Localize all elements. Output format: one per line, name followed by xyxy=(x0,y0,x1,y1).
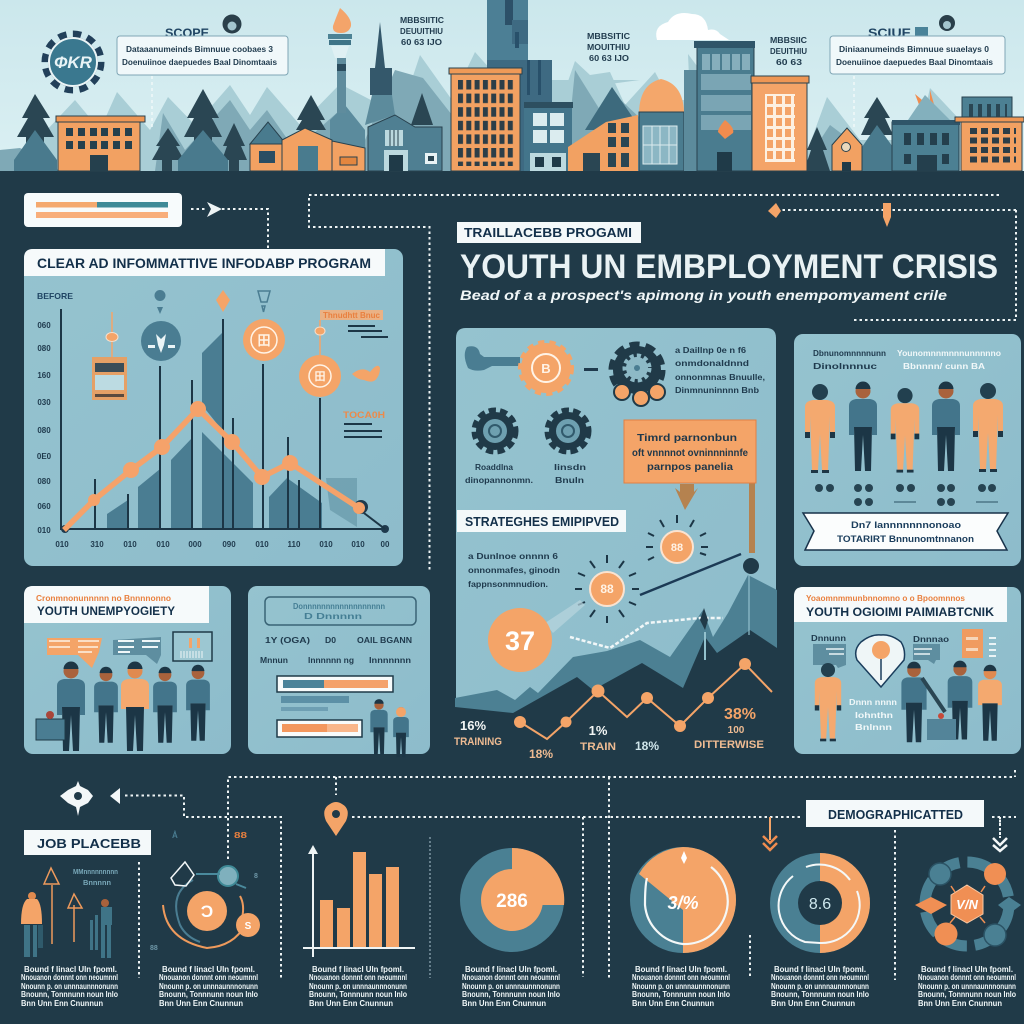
icon: gear left xyxy=(475,411,515,451)
icon: orange coin 1: 田 xyxy=(257,333,271,348)
scope callout right: Doenuiinoe daepuedes Baal Dinomtaais xyxy=(836,58,994,67)
bottom text column 4: Nnouanon donnnt onn neoumnnl xyxy=(462,973,560,982)
top label right: MBBSIIC xyxy=(770,36,807,45)
top label by church: DEUUITHIU xyxy=(400,27,443,36)
bar two xyxy=(277,720,362,737)
target orbit illustration: Å xyxy=(172,831,178,840)
x axis labels: 000 xyxy=(188,540,202,549)
faint white pylons xyxy=(152,76,854,130)
bottom text column 2: Bound f linacl Uln fpoml. xyxy=(162,965,255,974)
y axis labels: 080 xyxy=(37,344,51,353)
icon: orange coin 2 xyxy=(299,320,341,397)
scope callout right xyxy=(830,15,1005,74)
annotation top right: Thnudhtt Bnuc xyxy=(323,311,381,320)
job placement heading xyxy=(24,830,151,855)
table labels xyxy=(260,636,412,665)
gear captions: dinopannonmn. xyxy=(465,476,533,485)
bottom text column 4: Nnounn p. on unnnaunnnonunn xyxy=(462,982,560,991)
mini chart card xyxy=(173,632,212,661)
church xyxy=(365,22,442,171)
bottom text column 5: Nnouanon donnnt onn neoumnnl xyxy=(632,973,730,982)
torch tower xyxy=(328,8,352,113)
people group xyxy=(36,662,210,751)
annotation lower right xyxy=(343,410,385,437)
building: small gabled house xyxy=(832,128,862,171)
bottom text column 6: Bnn Unn Enn Cnunnun xyxy=(771,999,855,1008)
bottom text column 3: Bound f linacl Uln fpoml. xyxy=(312,965,404,974)
panel text: Younomnnmnnnunnnnno xyxy=(897,349,1001,358)
icon: orange pin xyxy=(216,290,230,312)
strategies heading xyxy=(457,510,626,532)
small note xyxy=(73,869,118,887)
stat labels: TRAINING xyxy=(454,736,502,748)
scope callout left: Doenuiinoe daepuedes Baal Dinomtaais xyxy=(122,58,278,67)
speech bubble right xyxy=(913,635,949,664)
scope callout right: Diniaanumeinds Bimnuue suaelays 0 xyxy=(839,45,990,54)
teal speech bubble xyxy=(113,637,161,664)
callout: orange sign: Timrd parnonbun xyxy=(637,433,737,444)
bottom text column 2: Bnounn, Tonnnunn noun Inlo xyxy=(159,990,258,999)
top label by church: MBBSIITIC xyxy=(400,16,444,25)
speech bubble left: Dnnunn xyxy=(811,634,846,643)
panel: line chart xyxy=(24,249,403,566)
table labels: OAIL BGANN xyxy=(357,636,412,645)
cloud xyxy=(656,13,729,40)
stat labels: 38% xyxy=(724,706,756,723)
panel heading: YOUTH UNEMPYOGIETY xyxy=(37,606,175,618)
dotted connectors lower xyxy=(125,770,1016,980)
panel heading xyxy=(24,249,385,276)
icon: white down arrows xyxy=(993,820,1007,851)
building: orange houses xyxy=(250,122,365,171)
bottom text column 4 xyxy=(462,965,560,1008)
top label right: DEUITHIU xyxy=(770,47,807,56)
x axis labels: 010 xyxy=(319,540,333,549)
table labels: Innnnnnn xyxy=(369,656,411,665)
people row xyxy=(805,382,1003,473)
bottom text column 3 xyxy=(309,965,407,1008)
strategies text xyxy=(468,552,560,589)
white caption: Iohnthn xyxy=(855,711,893,720)
bottom text column 1: Bound f linacl Uln fpoml. xyxy=(24,965,117,974)
ribbon banner: Dn7 Iannnnnnnonoao xyxy=(851,520,962,530)
strategies text: onnonmafes, ginodn xyxy=(468,566,560,575)
y axis labels: 060 xyxy=(37,502,51,511)
icon: orange sign xyxy=(92,312,127,400)
scope callout left xyxy=(117,14,288,75)
icon: location pin xyxy=(324,802,348,836)
chart axes and stems xyxy=(61,309,389,533)
small note: Bnnnnn xyxy=(83,880,111,887)
bar chart xyxy=(303,845,415,957)
subtitle tag xyxy=(457,222,641,243)
bottom text column 4: Bnn Unn Enn Cnunnun xyxy=(462,999,546,1008)
header badge: gear logo xyxy=(46,35,100,89)
dashed white trend xyxy=(570,618,723,648)
bottom text column 1: Bnn Unn Enn Cnunnun xyxy=(21,999,103,1008)
panel: youth unemployment people xyxy=(24,586,231,754)
x axis labels xyxy=(55,540,390,549)
y axis labels: 010 xyxy=(37,526,51,535)
pie chart 2 xyxy=(630,847,736,953)
gear captions: Roaddlna xyxy=(475,463,514,472)
bottom text column 2: Nnounn p. on unnnaunnnonunn xyxy=(159,982,258,991)
donut chart 1: 286 xyxy=(496,891,528,912)
strategies text: a Dunlnoe onnnn 6 xyxy=(468,552,559,561)
gear description xyxy=(675,346,765,395)
stat labels: 18% xyxy=(635,739,659,753)
x axis labels: 010 xyxy=(351,540,365,549)
x axis labels: 110 xyxy=(288,540,301,549)
table labels: D0 xyxy=(325,636,337,645)
panel text: Dinolnnnuc xyxy=(813,362,878,371)
y axis labels: 030 xyxy=(37,398,51,407)
icon: sun coin lower: 88 xyxy=(600,582,614,596)
icon: key and orange gear: B xyxy=(541,361,551,376)
icon: sun coin upper xyxy=(646,515,708,563)
bottom text column 1 xyxy=(21,965,118,1008)
background mountains xyxy=(0,52,960,171)
tall blue towers xyxy=(487,0,573,171)
top label centre: MBBSITIC xyxy=(587,32,630,41)
icon: dark gear with coins xyxy=(613,346,665,406)
trees xyxy=(17,89,893,171)
icon: sun coin upper: 88 xyxy=(671,542,683,554)
callout: orange sign xyxy=(624,420,756,553)
bottom text column 1: Bnounn, Tonnnunn noun Inlo xyxy=(21,990,118,999)
donut chart 3 xyxy=(770,853,870,953)
panel heading xyxy=(794,587,1007,622)
top label by church xyxy=(400,16,444,47)
bottom text column 5: Nnounn p. on unnnaunnnonunn xyxy=(632,982,730,991)
x axis labels: 010 xyxy=(123,540,137,549)
job placement illustration xyxy=(21,868,118,958)
icon: teal globe xyxy=(141,290,181,361)
panel: youth opinion xyxy=(794,587,1021,754)
table labels: Mnnun xyxy=(260,656,288,665)
area bars xyxy=(107,333,357,529)
legend box top left xyxy=(24,193,182,227)
bottom text column 4: Bound f linacl Uln fpoml. xyxy=(465,965,557,974)
bottom text column 7: Bnn Unn Enn Cnunnun xyxy=(918,999,1002,1008)
gear captions xyxy=(465,463,586,485)
bottom text column 7 xyxy=(918,965,1016,1008)
y axis labels: 160 xyxy=(37,371,51,380)
stat labels: DITTERWISE xyxy=(694,739,764,751)
job placement heading: JOB PLACEBB xyxy=(37,836,141,851)
icon: orange coin 1 xyxy=(243,291,285,361)
x axis labels: 090 xyxy=(222,540,236,549)
bottom text column 2: Nnouanon donnnt onn neoumnnl xyxy=(159,973,258,982)
bottom text column 3: Bnounn, Tonnnunn noun Inlo xyxy=(309,990,407,999)
building: large orange tower xyxy=(449,68,522,171)
building: left school xyxy=(56,116,145,171)
speech bubble right: Dnnnao xyxy=(913,635,949,644)
terrain teal xyxy=(455,575,777,750)
top label by church: 60 63 IJO xyxy=(401,38,442,47)
bottom text column 6: Bnounn, Tonnnunn noun Inlo xyxy=(771,990,869,999)
bottom text column 6: Bound f linacl Uln fpoml. xyxy=(774,965,866,974)
building: orange grid tower xyxy=(751,76,809,171)
y axis labels: 060 xyxy=(37,321,51,330)
teal worker xyxy=(90,899,112,958)
y axis labels: 080 xyxy=(37,477,51,486)
icon: node and arrow xyxy=(60,781,120,816)
ribbon banner xyxy=(803,513,1008,550)
milestone line xyxy=(640,554,759,660)
icon: small flower xyxy=(352,366,380,382)
orange trend on terrain xyxy=(514,658,772,739)
panel heading: YOUTH OGIOIMI PAIMIABTCNIK xyxy=(806,607,995,619)
gear captions: Iinsdn xyxy=(554,463,586,472)
bar one xyxy=(277,676,393,692)
building: gabled orange house xyxy=(568,87,638,171)
gear description: onmdonaldnnd xyxy=(675,359,749,368)
top label right xyxy=(770,36,807,67)
panel heading: Cronmnonunnnnn no Bnnnnonno xyxy=(36,594,171,603)
stat labels: 100 xyxy=(728,725,745,736)
network wheel xyxy=(915,862,1021,946)
scope callout right: SCIUE xyxy=(868,26,911,40)
x axis labels: 010 xyxy=(255,540,269,549)
top label centre: 60 63 IJO xyxy=(589,54,629,63)
target orbit illustration: S xyxy=(245,921,252,932)
stat labels: 18% xyxy=(529,747,553,761)
bottom text column 4: Bnounn, Tonnnunn noun Inlo xyxy=(462,990,560,999)
white caption: Dnnn nnnn xyxy=(849,698,897,707)
bottom text column 1: Nnounn p. on unnnaunnnonunn xyxy=(21,982,118,991)
y axis labels xyxy=(37,321,52,535)
dots xyxy=(815,484,998,506)
panel: comparison bars xyxy=(248,586,430,757)
ribbon banner: TOTARIRT Bnnunomtnnanon xyxy=(837,534,974,544)
x axis labels: 00 xyxy=(381,540,390,549)
small note: MMnnnnnnnnn xyxy=(73,869,118,876)
bottom text column 5: Bound f linacl Uln fpoml. xyxy=(635,965,727,974)
people group xyxy=(815,661,1002,742)
strategies heading: STRATEGHES EMIPIPVED xyxy=(465,515,619,529)
bottom text column 7: Bound f linacl Uln fpoml. xyxy=(921,965,1013,974)
icon: gear right xyxy=(548,411,588,451)
dotted connectors upper xyxy=(191,195,1016,572)
bottom text column 5 xyxy=(632,965,730,1008)
y axis labels: 0E0 xyxy=(37,452,52,461)
gear description: onnonmnas Bnuulle, xyxy=(675,373,765,382)
annotation lower right: TOCA0H xyxy=(343,410,385,420)
panel: strategies xyxy=(454,328,777,761)
orange worker xyxy=(21,892,43,957)
bottom text column 3: Nnounn p. on unnnaunnnonunn xyxy=(309,982,407,991)
top label centre xyxy=(587,32,630,63)
outlined caption xyxy=(265,597,416,625)
bottom text column 1: Nnouanon donnnt onn neoumnnl xyxy=(21,973,118,982)
speech bubble left xyxy=(811,634,846,668)
panel text: Dbnunomnnnnunn xyxy=(813,349,886,358)
scope callout left: Dataaanumeinds Bimnuue coobaes 3 xyxy=(126,45,274,54)
top label right: 60 63 xyxy=(776,58,803,67)
gear description: a Daillnp 0e n f6 xyxy=(675,346,747,355)
outlined caption: Donnnnnnnnnnnnnnnnnn xyxy=(293,602,385,611)
orange speech bubble xyxy=(47,638,102,668)
target orbit illustration: 8 xyxy=(254,873,258,880)
panel heading: Yoaomnmmunbnnomno o o Bpoomnnos xyxy=(806,594,966,603)
bottom text column 6 xyxy=(771,965,869,1008)
stat labels xyxy=(454,706,764,761)
header badge: gear logo: ФKR xyxy=(54,53,93,72)
icon: sun coin lower xyxy=(575,555,639,623)
bottom text column 5: Bnn Unn Enn Cnunnun xyxy=(632,999,714,1008)
bottom text column 3: Nnouanon donnnt onn neoumnnl xyxy=(309,973,407,982)
white caption: Bnlnnn xyxy=(855,723,892,732)
bottom text column 2 xyxy=(159,965,258,1008)
target orbit illustration xyxy=(150,831,260,952)
subtitle tag: TRAILLACEBB PROGAMI xyxy=(464,226,632,240)
x axis labels: 010 xyxy=(156,540,170,549)
note card xyxy=(962,629,996,658)
callout: orange sign: parnpos panelia xyxy=(647,462,733,473)
panel text xyxy=(813,349,1001,371)
building: dome xyxy=(639,79,684,171)
bottom text column 5: Bnounn, Tonnnunn noun Inlo xyxy=(632,990,730,999)
terrain dark xyxy=(455,630,777,753)
stat circle 37 xyxy=(488,600,585,672)
panel heading xyxy=(24,586,209,623)
building: tall teal tower with flame xyxy=(684,41,755,171)
annotation top right xyxy=(320,310,388,337)
top label centre: MOUITHIU xyxy=(587,43,630,52)
panel text: Bbnnnn/ cunn BA xyxy=(903,362,985,371)
main title block xyxy=(457,222,998,303)
gear captions: Bnuln xyxy=(555,476,584,485)
network wheel: V/N xyxy=(956,897,978,912)
icon: key and orange gear xyxy=(465,343,598,393)
scope callout left: SCOPE xyxy=(165,26,209,40)
y axis labels: 080 xyxy=(37,426,51,435)
tagline: Bead of a a prospect's apimong in youth enempomyament crile xyxy=(460,287,947,303)
panel: five young people xyxy=(794,334,1021,566)
gear description: Dinmnuninnnn Bnb xyxy=(675,386,759,395)
bottom text column 3: Bnn Unn Enn Cnunnun xyxy=(309,999,393,1008)
icon: orange down arrows xyxy=(763,817,777,850)
location pin badge xyxy=(856,635,905,687)
two small figures xyxy=(370,699,409,757)
table labels: 1Y (OGA) xyxy=(265,636,310,645)
target orbit illustration: 88 xyxy=(150,945,158,952)
icon: orange coin 2: 田 xyxy=(314,370,326,383)
white caption xyxy=(849,698,897,732)
bottom text column 6: Nnouanon donnnt onn neoumnnl xyxy=(771,973,869,982)
city skyline header xyxy=(0,0,1024,171)
bottom text column 2: Bnn Unn Enn Cnunnun xyxy=(159,999,243,1008)
donut chart 3: 8.6 xyxy=(809,896,831,913)
right building group xyxy=(892,90,1024,171)
stat circle 37: 37 xyxy=(505,626,535,656)
stat labels: 16% xyxy=(460,718,486,733)
icon: orange signs xyxy=(44,868,82,944)
panel heading: CLEAR AD INFOMMATTIVE INFODABP PROGRAM xyxy=(37,256,371,271)
pie chart 2: 3/% xyxy=(667,893,699,913)
title: YOUTH UN EMBPLOYMENT CRISIS xyxy=(460,248,998,286)
before label: BEFORE xyxy=(37,291,73,301)
outlined caption: D Dnnnnn xyxy=(304,612,362,621)
bottom text column 6: Nnounn p. on unnnaunnnonunn xyxy=(771,982,869,991)
stat labels: 1% xyxy=(589,723,608,738)
demographics heading: DEMOGRAPHICATTED xyxy=(828,808,963,822)
teal sub bar short xyxy=(281,707,328,711)
strategies text: fappnsonmnudion. xyxy=(468,580,548,589)
demographics heading xyxy=(806,800,984,827)
x axis labels: 010 xyxy=(55,540,69,549)
donut chart 1 xyxy=(460,848,564,952)
target orbit illustration: 88 xyxy=(234,831,248,840)
table labels: Innnnnn ng xyxy=(308,656,354,665)
callout: orange sign: oft vnnnnot ovninnninnfe xyxy=(632,448,748,459)
x axis labels: 310 xyxy=(90,540,104,549)
target orbit illustration: Ɔ xyxy=(201,902,213,921)
orange trend line xyxy=(64,401,365,530)
teal sub bars xyxy=(281,696,349,703)
stat labels: TRAIN xyxy=(580,741,616,753)
